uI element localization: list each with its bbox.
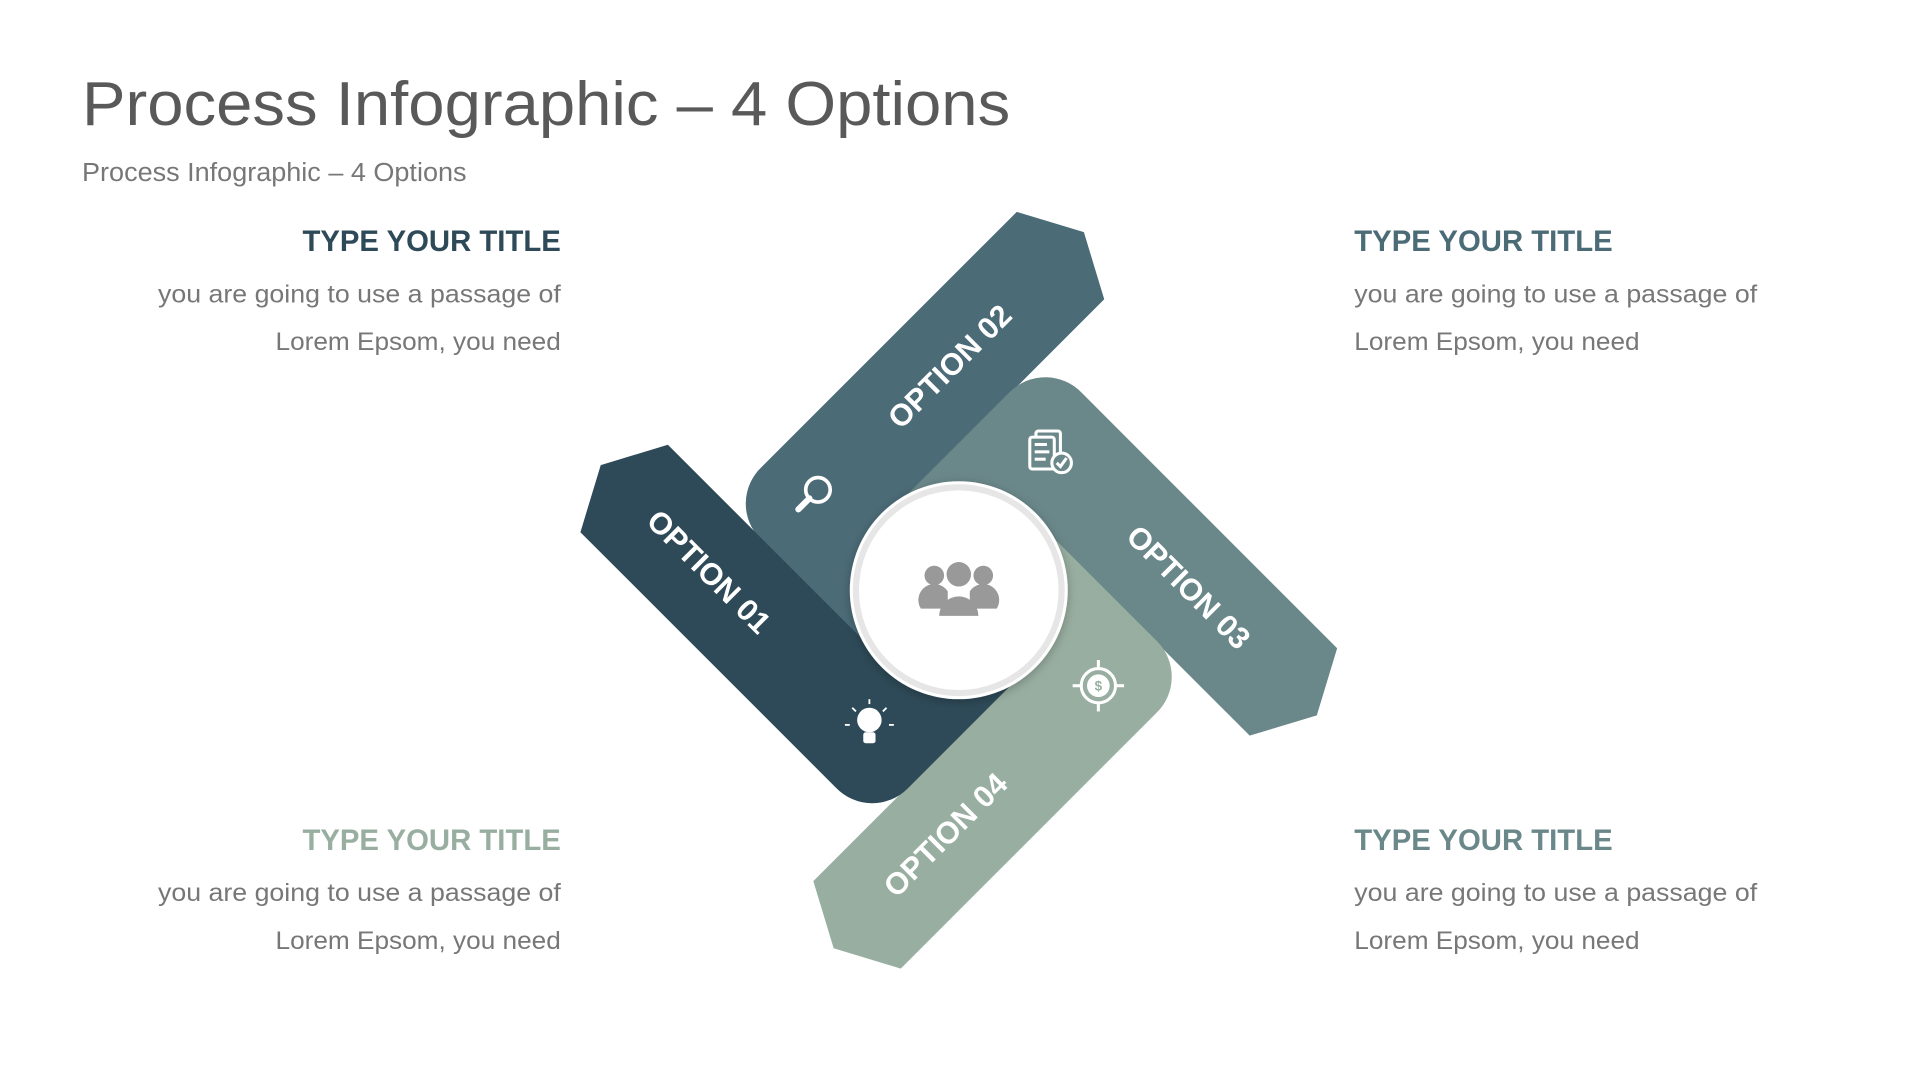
band: option 04 (717, 517, 1193, 992)
text block: top-left: you are going to use a passage of (158, 280, 562, 308)
text block: bottom-right: Lorem Epsom, you need (1354, 927, 1640, 955)
text block: bottom-left: you are going to use a passage of (158, 879, 562, 907)
band: option 01 (557, 349, 1032, 824)
pinwheel diagram (557, 188, 1361, 992)
icon: magnifier (798, 478, 830, 509)
text block: top-right: Lorem Epsom, you need (1354, 328, 1640, 356)
band: option 02 (725, 188, 1200, 664)
icon: people group (918, 562, 999, 616)
band: option 01: OPTION 01 (640, 503, 777, 641)
icon: dollar target: $ (1095, 679, 1103, 694)
subtitle: Process Infographic – 4 Options (82, 159, 467, 187)
icon: light bulb (845, 699, 894, 743)
band: option 03: OPTION 03 (1120, 519, 1257, 656)
text block: top-left: TYPE YOUR TITLE (302, 225, 561, 258)
band: option 02: OPTION 02 (882, 298, 1019, 435)
icon: dollar target (1073, 660, 1124, 711)
text block: top-left: Lorem Epsom, you need (276, 328, 561, 356)
text block: top-right: TYPE YOUR TITLE (1354, 225, 1613, 258)
text block: bottom-left (158, 824, 562, 955)
text block: top-right: you are going to use a passage of (1354, 280, 1758, 308)
text block: bottom-right (1354, 824, 1758, 955)
title: Process Infographic – 4 Options (82, 69, 1010, 139)
text block: bottom-right: TYPE YOUR TITLE (1354, 824, 1613, 857)
band: option 03 (885, 356, 1361, 832)
text block: bottom-left: Lorem Epsom, you need (276, 927, 561, 955)
text block: bottom-right: you are going to use a passage of (1354, 879, 1758, 907)
text block: top-right (1354, 225, 1758, 356)
icon: document check (1030, 431, 1071, 473)
text block: bottom-left: TYPE YOUR TITLE (302, 824, 561, 857)
text block: top-left (158, 225, 562, 356)
band: option 04: OPTION 04 (877, 767, 1014, 904)
center circle (850, 481, 1068, 699)
